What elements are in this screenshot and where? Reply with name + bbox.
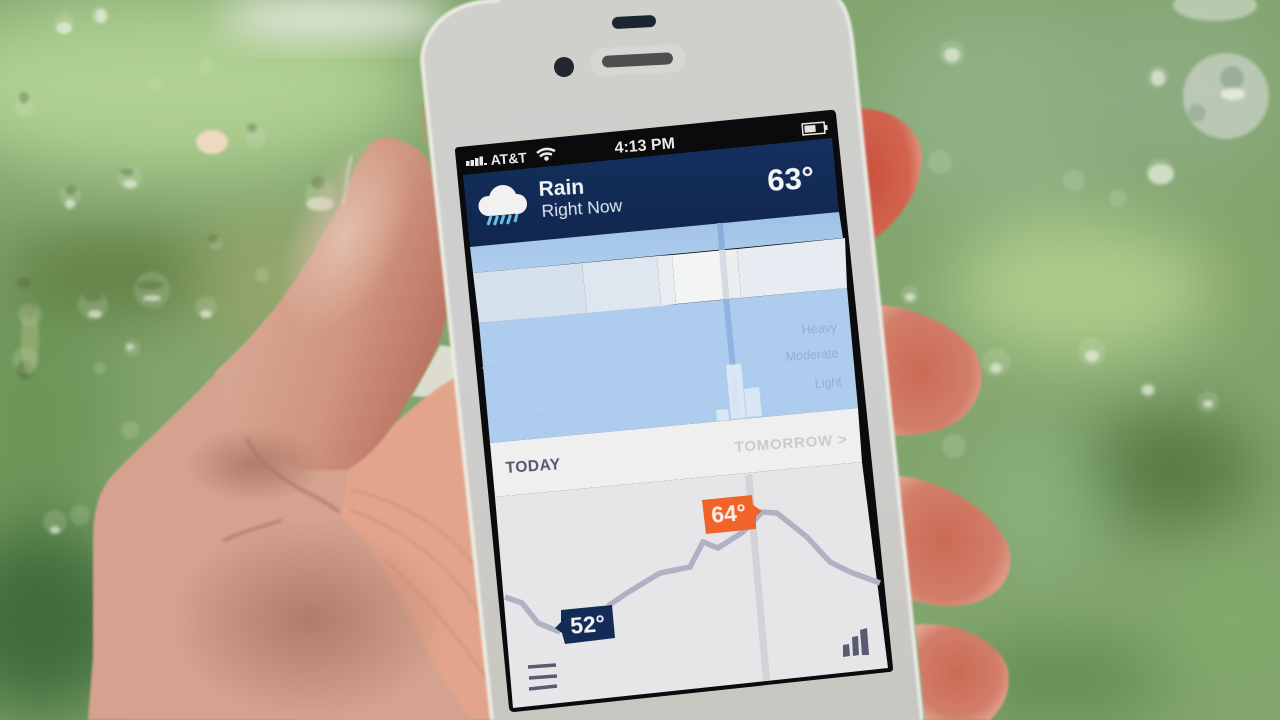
- back of hand soft shadow: [170, 520, 450, 720]
- intensity label: light: Light: [814, 375, 843, 391]
- condition subtitle: Right Now: [541, 195, 623, 221]
- right side rim: [838, 0, 922, 720]
- current time marker lower: [723, 299, 741, 418]
- icon: rain cloud: [478, 185, 527, 225]
- finger three: [890, 476, 1010, 606]
- palm lines: [350, 490, 488, 680]
- icon: signal bars: [466, 156, 487, 166]
- precipitation panel: [470, 212, 858, 443]
- intensity label: moderate: Moderate: [785, 346, 839, 364]
- back of the hand: [88, 365, 473, 720]
- app header: current conditions: [463, 138, 839, 247]
- high temperature flag: 64°: [710, 499, 747, 528]
- speaker slit: [589, 44, 687, 76]
- side button: [422, 103, 425, 143]
- phone body: [422, 0, 922, 720]
- hand: palm and thumb: [88, 117, 500, 720]
- current time line: [745, 474, 770, 681]
- temperature line chart rising and falling segment: [608, 512, 880, 606]
- left side rim: [422, 0, 500, 720]
- palm: [300, 375, 500, 720]
- finger four: [915, 624, 1009, 720]
- phone screen bezel: [455, 110, 893, 712]
- thumb tip highlight: [251, 117, 439, 353]
- low temperature flag: 52°: [569, 610, 606, 639]
- thumb fold: [342, 155, 352, 205]
- icon: hamburger menu: [528, 665, 557, 689]
- earpiece top slit: [612, 15, 656, 29]
- status bar: [466, 122, 828, 168]
- icon: wifi: [537, 149, 555, 160]
- low temperature flag: [555, 605, 615, 644]
- high temperature flag: [702, 495, 762, 534]
- tab: today: TODAY: [505, 456, 561, 477]
- finger one: [850, 109, 922, 240]
- thumb base shadow: [185, 427, 325, 503]
- today and tomorrow tabs: [490, 408, 862, 497]
- light sliver behind the thumb: [412, 345, 470, 400]
- creases: [223, 438, 340, 541]
- rain grid: [482, 336, 812, 420]
- current time marker upper: [717, 223, 725, 250]
- temperature line chart: [505, 597, 560, 632]
- intensity label: heavy: Heavy: [801, 321, 838, 337]
- condition title: Rain: [538, 176, 585, 201]
- temperature graph panel: [495, 462, 888, 708]
- icon: battery: [802, 122, 828, 135]
- hand: fingers behind the phone: [850, 109, 1010, 720]
- finger two: [870, 305, 982, 436]
- raindrops on the window: [12, 0, 1269, 534]
- icon: bar chart: [843, 628, 869, 657]
- carrier text: AT&T: [490, 149, 528, 168]
- clock: 4:13 PM: [614, 135, 676, 157]
- current temperature: 63°: [766, 160, 815, 198]
- cloud cover band: [473, 238, 847, 323]
- rain intensity bars: [716, 364, 762, 421]
- tab: tomorrow: TOMORROW >: [734, 431, 848, 456]
- camera lens: [554, 57, 574, 77]
- thumb: [215, 138, 447, 470]
